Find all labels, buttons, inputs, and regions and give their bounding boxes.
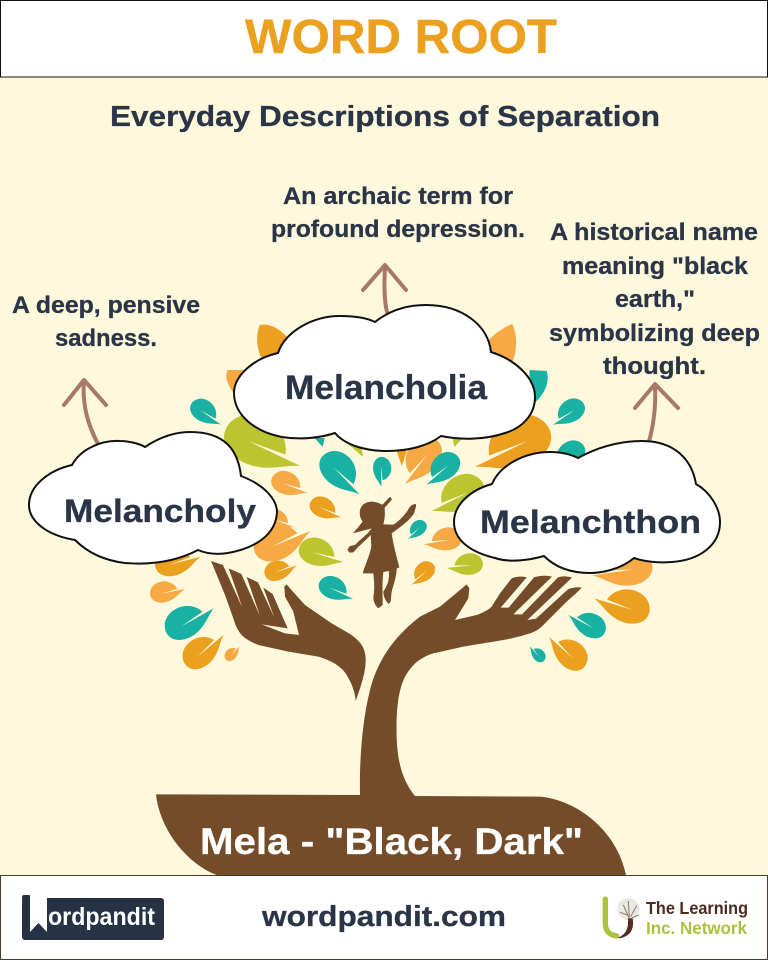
Wordpandit logo: ordpandit [48, 903, 156, 931]
trunk, right hand and ground [156, 576, 626, 875]
child silhouette [347, 497, 416, 608]
left hand [211, 561, 366, 701]
The Learning Inc. Network logo: The Learning [646, 898, 748, 918]
definition: Melanchthon: symbolizing deep [549, 320, 760, 347]
leaves canopy [148, 324, 655, 677]
definition: Melanchthon [549, 219, 760, 380]
footer bar [0, 876, 768, 960]
definition: Melancholy: sadness. [55, 325, 157, 352]
website: wordpandit.com [261, 901, 506, 933]
cloud: Melancholia: Melancholia [285, 369, 488, 407]
definition: Melanchthon: A historical name [550, 219, 758, 246]
arrow: to Melanchthon definition [635, 384, 678, 445]
definition: Melancholy [12, 292, 200, 352]
header banner [0, 0, 768, 77]
cloud: Melanchthon [454, 441, 720, 573]
cloud: Melancholy: Melancholy [64, 493, 256, 529]
root label: Mela - "Black, Dark" [200, 821, 583, 862]
subtitle: Everyday Descriptions of Separation [110, 101, 660, 133]
definition: Melanchthon: meaning "black [562, 253, 749, 280]
definition: Melancholia: profound depression. [271, 216, 525, 243]
definition: Melancholy: A deep, pensive [12, 292, 200, 319]
tree with hands and ground [156, 561, 626, 875]
cloud: Melancholia [234, 305, 535, 451]
definition: Melancholia: An archaic term for [283, 183, 513, 210]
cloud: Melancholy [29, 432, 277, 564]
arrow: to Melancholia definition [363, 265, 406, 312]
The Learning Inc. Network logo: Inc. Network [646, 918, 747, 938]
definition: Melanchthon: earth," [615, 286, 695, 313]
cloud: Melanchthon: Melanchthon [480, 504, 701, 540]
definition: Melanchthon: thought. [603, 353, 706, 380]
The Learning Inc. Network logo [605, 898, 748, 938]
definition: Melancholia [271, 183, 525, 243]
Wordpandit logo [22, 890, 164, 940]
arrow: to Melancholy definition [64, 380, 106, 444]
title: WORD ROOT [245, 11, 557, 64]
